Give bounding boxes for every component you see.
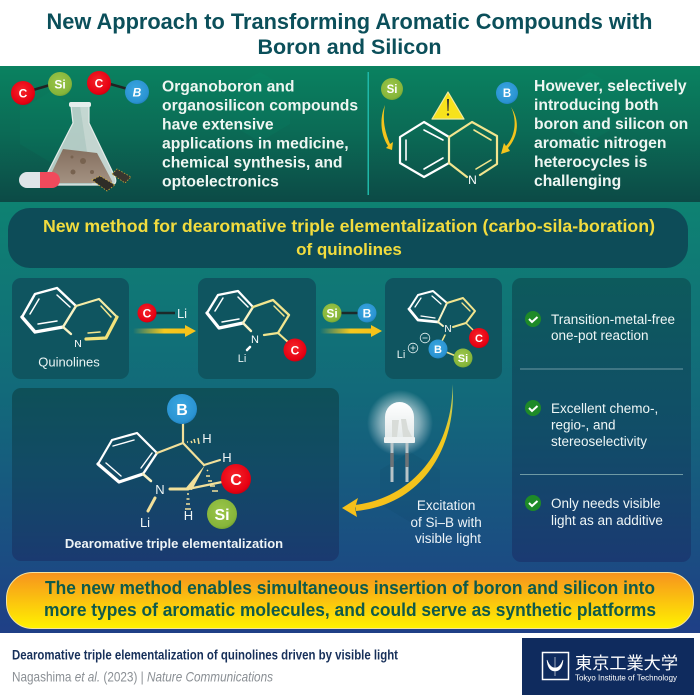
text: organoboron applications: organosilicon compounds: [162, 98, 358, 114]
panel: dearomative product: [12, 388, 339, 561]
panel: borate complex: N: [444, 324, 452, 335]
icon: flask with pill and chips: [19, 102, 131, 191]
footer: citation: Nagashima et al. (2023) | Nature Communications: [12, 668, 273, 684]
feature: visible light: Only needs visible: [551, 496, 661, 511]
panel: lithiated intermediate: N: [251, 334, 259, 346]
chemical structure: dearomative product: [98, 394, 251, 530]
text: organoboron applications: chemical synthesis, and: [162, 154, 342, 172]
feature: selectivity: Excellent chemo-,: [551, 401, 658, 416]
chemical structure: dearomative product: C: [230, 472, 242, 489]
feature: transition-metal-free: Transition-metal-free: [551, 312, 675, 327]
header: title: [0, 0, 700, 66]
feature: transition-metal-free: one-pot reaction: [551, 328, 649, 343]
panel: borate complex: Si: [458, 353, 468, 365]
text: selective introduction challenge: challenging: [534, 173, 621, 190]
panel: background section: [0, 202, 700, 633]
header: title: Boron and Silicon: [258, 35, 441, 59]
chemical structure: dearomative product: B: [176, 402, 188, 419]
panel: lithiated intermediate: [198, 278, 316, 379]
arrow: add C-Li reagent: C: [143, 306, 152, 320]
feature: visible light: [525, 495, 663, 528]
arrow: add Si-B reagent: Si: [326, 306, 338, 320]
logo: Tokyo Institute of Technology: Tokyo Institute of Technology: [575, 674, 677, 682]
logo: Tokyo Institute of Technology: 東京工業大学: [575, 654, 678, 673]
callout: conclusion pill: more types of aromatic molecules, and could serve as synthetic platforms: [44, 599, 656, 620]
text: selective introduction challenge: introducing both: [534, 97, 659, 114]
chemical structure: dearomative product: Li: [140, 515, 150, 530]
atoms: C-Si and C-B molecules: C: [19, 86, 28, 100]
panel: quinolines: N: [74, 338, 82, 350]
icon: LED light: [367, 390, 433, 482]
text: organoboron applications: applications in medicine,: [162, 136, 349, 152]
callout: conclusion pill: The new method enables simultaneous insertion of boron and silicon into: [45, 577, 655, 598]
panel: quinolines: [12, 278, 129, 379]
icon: warning triangle: [432, 92, 464, 119]
arrow: add C-Li reagent: Li: [177, 306, 187, 321]
text: organoboron applications: Organoboron and: [162, 78, 294, 96]
arrow: add Si-B reagent: B: [363, 306, 372, 320]
text: selective introduction challenge: However, selectively: [534, 78, 687, 95]
chemical structure: dearomative product: H: [184, 508, 193, 523]
chemical structure: quinoline with warning: [400, 92, 497, 187]
atoms: Si and B with curved arrows: Si: [387, 84, 397, 96]
chemical structure: dearomative product: Si: [214, 507, 230, 524]
chemical structure: dearomative product: H: [202, 431, 212, 446]
feature: selectivity: regio-, and: [551, 418, 616, 432]
panel: features list: [512, 278, 691, 562]
label: dearomative triple elementalization: Dearomative triple elementalization: [65, 536, 283, 551]
panel: lithiated intermediate: C: [291, 344, 300, 358]
footer: citation: [0, 633, 700, 700]
feature: visible light: light as an additive: [551, 513, 663, 528]
panel: lithiated intermediate: Li: [238, 353, 246, 365]
icon: pill: [19, 172, 60, 188]
callout: conclusion pill: [6, 572, 694, 628]
arrow: add C-Li reagent: [133, 304, 196, 337]
label: quinolines: Quinolines: [38, 354, 100, 370]
atoms: C-Si and C-B molecules: [11, 71, 149, 105]
icon: microchips: [92, 169, 131, 191]
panel: borate complex: C: [475, 333, 483, 345]
atoms: C-Si and C-B molecules: C: [95, 76, 104, 90]
panel: background information band: [0, 66, 700, 202]
atoms: Si and B with curved arrows: [381, 78, 518, 154]
feature: selectivity: stereoselectivity: [551, 434, 647, 449]
text: selective introduction challenge: boron and silicon on: [534, 116, 688, 133]
heading pill: new method: of quinolines: [296, 240, 402, 259]
text: excitation of Si-B: visible light: [415, 531, 481, 546]
text: organoboron applications: optoelectronics: [162, 174, 279, 190]
text: organoboron applications: have extensive: [162, 116, 274, 134]
heading pill: new method: New method for dearomative triple elementalization (carbo-sila-boration): [43, 216, 655, 236]
arrow: curved excitation arrow: [342, 384, 453, 517]
text: excitation of Si-B: of Si–B with: [410, 515, 482, 530]
text: selective introduction challenge: heterocycles is: [534, 154, 648, 171]
heading pill: new method: [8, 208, 688, 268]
footer: citation: Dearomative triple elementalization of quinolines driven by visible light: [12, 648, 398, 662]
chemical structure: dearomative product: N: [155, 482, 165, 497]
atoms: C-Si and C-B molecules: Si: [54, 78, 66, 92]
panel: borate complex: Li: [397, 349, 405, 361]
feature: selectivity: [525, 400, 658, 449]
text: excitation of Si-B: Excitation: [417, 498, 475, 513]
chemical structure: dearomative product: H: [222, 450, 232, 465]
logo: Tokyo Institute of Technology: [522, 638, 694, 695]
chemical structure: quinoline with warning: N: [468, 173, 477, 187]
atoms: Si and B with curved arrows: B: [503, 88, 511, 100]
arrow: add Si-B reagent: [320, 304, 382, 337]
text: selective introduction challenge: aromatic nitrogen: [534, 135, 666, 152]
atoms: C-Si and C-B molecules: B: [133, 86, 142, 100]
feature: transition-metal-free: [525, 311, 675, 343]
panel: borate complex: B: [434, 344, 442, 356]
header: title: New Approach to Transforming Aromatic Compounds with: [46, 9, 652, 34]
panel: borate complex: [385, 278, 502, 379]
